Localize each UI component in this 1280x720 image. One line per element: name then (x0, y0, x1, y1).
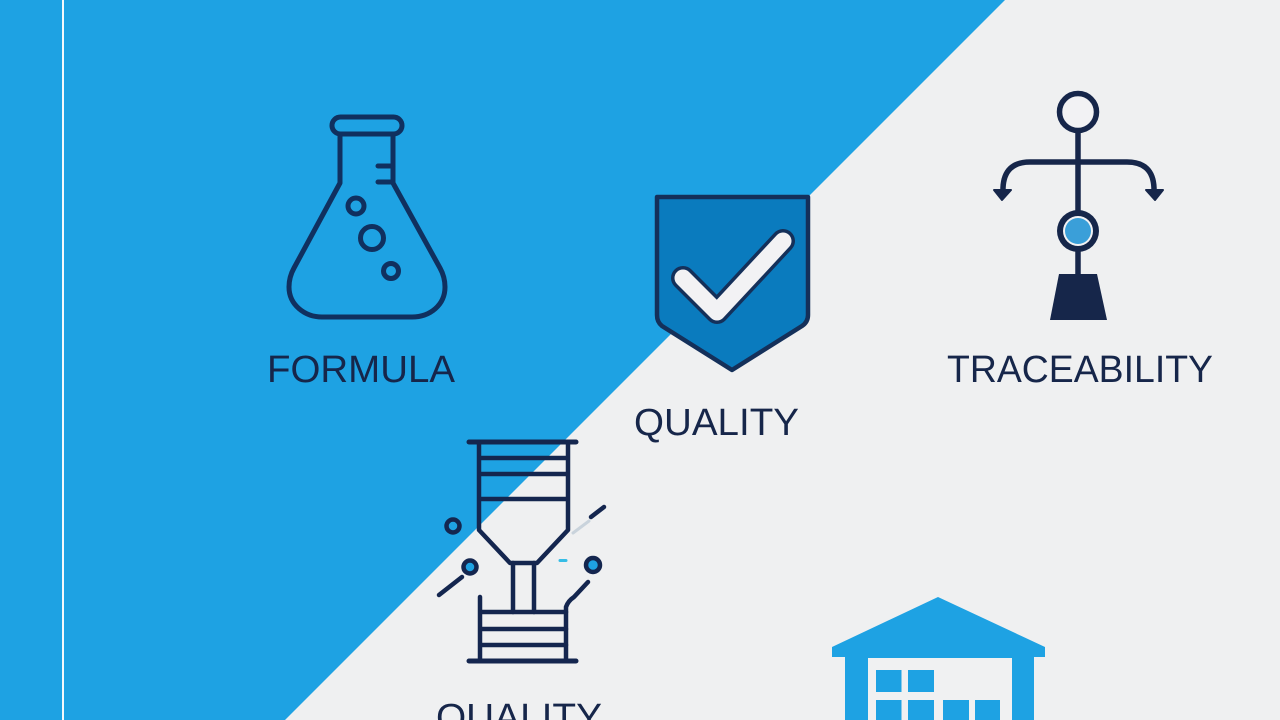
icon: warehouse (832, 597, 1045, 720)
label: traceability: TRACEABILITY (947, 349, 1213, 391)
icon: hopper machine (439, 442, 604, 661)
label: formula: FORMULA (267, 349, 456, 391)
panel: blue diagonal background (0, 0, 1005, 720)
icon: shield with label (634, 197, 808, 444)
icon: hopper machine with label (436, 442, 604, 720)
icon: traceability with label (947, 94, 1213, 391)
icon: shield with check mark (657, 197, 808, 370)
label: quality: QUALITY (634, 402, 799, 444)
icon: flask (289, 117, 445, 317)
icon: traceability tree (994, 94, 1163, 320)
icon: flask with label (267, 117, 456, 391)
